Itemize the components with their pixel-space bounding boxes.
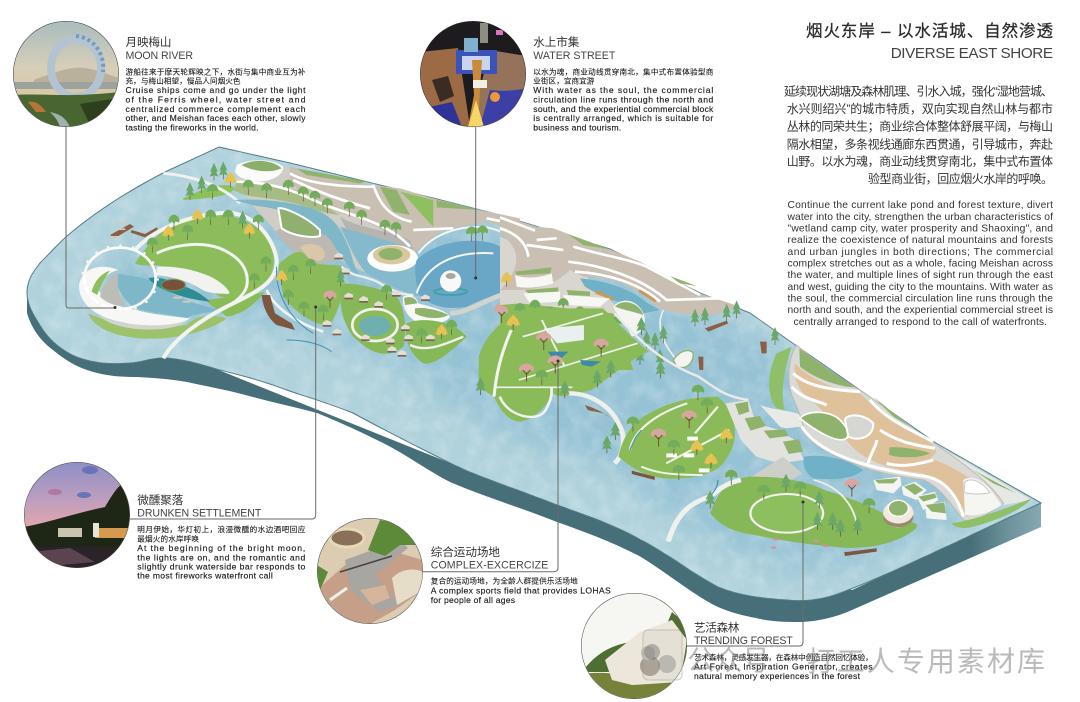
long taupe building band [290,167,520,253]
text: moon river [126,35,306,133]
photo: drunken settlement [24,462,130,568]
land under the north band [233,167,418,272]
text: trending forest: Art Forest, Inspiration Generator, creates [694,662,873,672]
pavilion roof [615,302,643,315]
text: complex-excercize: 复合的运动场地，为全龄人群提供乐活场地 [431,576,578,586]
text: complex-excercize: A complex sports field that provides LOHAS [431,586,611,596]
water shading [20,140,1050,610]
north building [235,160,283,182]
english description: and west, guiding the city to the mountains. With water as [788,282,1053,293]
playgrounds [544,325,584,343]
link walkway [760,405,803,428]
photo: art forest tent [581,593,687,699]
english description: complex stretches out as a whole, facing Meishan across [788,258,1053,270]
east roof [889,447,930,457]
text: water street: With water as the soul, the commercial [533,85,713,95]
white ribs [792,373,963,517]
tower top [964,480,990,494]
text: trending forest: natural memory experiences in the forest [694,671,861,681]
complex-excercize line [423,360,560,572]
green bank [233,182,340,215]
white terrace ribs [500,217,720,302]
pale platform [937,445,1032,505]
text: water street: circulation line runs through the north and [533,94,714,104]
moon river line [66,127,116,309]
lagoon [148,278,210,302]
text: drunken settlement: the most fireworks waterfront call [137,571,273,581]
trees west [147,161,512,343]
white tier podiums [515,273,610,307]
second island lawn [618,397,735,479]
low buildings [403,295,450,324]
fan lawn [278,252,343,325]
text: water street [533,35,714,133]
small roof pavilions [873,477,947,520]
lily pond [352,309,398,341]
dock [632,471,877,556]
text: drunken settlement: the lights are on, and the romantic and [137,552,306,562]
band bright roof [400,192,433,227]
fan edge path [267,290,323,332]
long promenade [615,313,749,400]
timber barges [595,288,657,303]
tiny pavilion [673,351,693,368]
text: water street: 水上市集 [533,35,580,49]
east tower [963,478,1002,515]
english description: Continue the current lake pond and forest texture, divert [788,200,1053,211]
text: complex-excercize: for people of all ages [431,595,515,605]
shore path [410,337,463,348]
lawn lower green [207,292,265,317]
trending forest line [687,500,804,646]
west stream [494,330,511,397]
lower skirt [952,498,1032,528]
low building roofs [404,297,448,318]
text: drunken settlement: 明月伊始，华灯初上，浪漫微醺的水边酒吧回应 [137,524,306,534]
open court [845,415,873,439]
watermark: 公众号 [687,645,770,676]
text: complex-excercize [431,545,611,605]
text: moon river: of the Ferris wheel, water street and [126,94,306,104]
water street line [474,127,477,280]
north building roof [242,161,282,171]
map: commercial complex at the east end [760,345,1032,528]
english description: the water, and multiple lines of sight run through the east [788,270,1053,281]
text: drunken settlement: 微醺聚落 [137,493,184,507]
timber pier [698,321,767,370]
river path [660,310,677,360]
central lawn [341,283,405,354]
text: water street: south, and the experiential commercial block [533,104,714,114]
big lawn [135,214,274,298]
pond water [359,316,391,336]
moon river crescent quay [79,267,190,326]
oval pavilion [367,245,418,272]
south green shore [406,320,467,364]
stream [277,267,332,352]
inner path [157,244,247,307]
ribbon promenade [135,213,277,358]
text: moon river: Cruise ships come and go under the light [126,85,306,95]
north-west shore strip [769,347,792,410]
text: drunken settlement: 最烟火的水岸呼唤 [137,533,199,543]
ferris wheel ring [83,247,157,310]
band roofs [297,168,480,215]
shore green line [873,397,1017,493]
heading [806,22,1053,62]
third island lawn [710,477,917,548]
complex base [789,345,1003,521]
text: moon river: tasting the fireworks in the world. [126,123,258,133]
band to the east [450,290,520,313]
text: water street: is centrally arranged, which is suitable for [533,113,713,123]
inner pond [804,456,863,479]
south loop [500,387,552,417]
text: water street: 业街区，宜商宜游 [533,76,595,86]
text: drunken settlement: DRUNKEN SETTLEMENT [137,507,262,519]
text: moon river: 充，与梅山相望，慢品人间烟火色 [126,76,241,86]
map: central and eastern islands [476,308,917,556]
white plaza [157,266,229,294]
drunken settlement line [130,306,317,519]
canal [580,278,660,313]
text: moon river: centralized commerce complement each [126,104,306,114]
corner pavilion [613,301,645,337]
lawn paths [494,313,638,387]
english description: realize the coexistence of natural mountains and forests [788,235,1053,246]
watermark: 打工人专用素材库 [807,646,1045,677]
heading: 烟火东岸 – 以水活城、自然渗透 [806,22,1053,40]
chinese description: 水兴则绍兴”的城市特质，双向实现自然山林与都市 [787,101,1053,116]
central basin [340,227,420,297]
callout lines [66,127,804,646]
terrain model base [27,147,1041,622]
text: moon river: MOON RIVER [126,50,193,62]
text: trending forest: TRENDING FOREST [694,635,793,647]
pond rim [417,227,520,293]
lotus flowers [771,538,828,549]
oval green roof [800,412,848,440]
photo: ferris wheel [13,21,120,127]
english description: and urban jungles in both directions; The commercial [788,247,1053,258]
trees east [476,315,875,537]
english description [786,200,1053,328]
heading: DIVERSE EAST SHORE [891,45,1053,62]
inner bay [116,273,220,318]
south ribbon [668,480,741,542]
photo: water street [420,21,526,127]
photo: sports field [317,518,423,624]
crescent shade [100,317,188,330]
cottages [323,253,435,357]
english description: north and south, and the experiential commercial street is [788,305,1053,316]
trees north [495,271,779,367]
central island lawn [479,308,649,422]
model side wall [27,293,1041,622]
stream east [630,430,718,498]
chinese description: 隔水相望，多条视线通廊东西贯通，引导城市，奔赴 [787,136,1053,151]
map: west section [79,160,520,364]
text: water street: business and tourism. [533,123,621,133]
lagoon island [161,279,185,291]
land under the terraces [500,237,617,320]
chinese description [784,84,1053,186]
chinese description: 山野。以水为魂，商业动线贯穿南北，集中式布置体 [787,154,1053,168]
second island paths [630,403,729,475]
map: north band [495,215,779,370]
top green roof [799,348,855,387]
grey plaza wedge [100,273,127,307]
tents [666,437,709,472]
water surface [27,147,1041,601]
bridge ribbon [569,393,623,463]
text: complex-excercize: 综合运动场地 [431,545,500,559]
green patch inside ring [92,271,110,295]
english description: water into the city, strengthen the urban characteristics of [786,212,1053,223]
bridge underside [585,405,611,418]
sandy court [300,244,325,261]
text: trending forest [694,620,873,681]
english description: centrally arranged to respond to the call of waterfronts. [794,317,1047,328]
text: trending forest: 艺活森林 [694,620,740,634]
chinese description: 丛林的同荣共生；商业综合体整体舒展平阔，与梅山 [787,118,1053,133]
text: moon river: other, and Meishan faces each other, slowly [126,113,306,123]
taupe terraces [500,215,740,315]
playground pieces [548,352,601,367]
text: water street: 以水为魂，商业动线贯穿南北，集中式布置体验型商 [533,66,714,76]
boats [110,223,191,303]
roof terraces [515,234,697,296]
english description: the soul, the commercial circulation line runs through the [788,294,1053,304]
steps [735,457,802,487]
watermark [643,630,1045,680]
north-west path [163,173,240,203]
text: drunken settlement: At the beginning of the bright moon, [137,543,305,553]
oval lawn [750,494,823,533]
central lawn top [500,303,633,370]
text: water street: WATER STREET [533,50,616,62]
building B podium [275,227,340,265]
island skirt under the ferris wheel [88,313,227,339]
stepped roofs [735,402,803,454]
text: moon river: 月映梅山 [126,35,172,49]
english description: "wetland camp city, water prosperity and Shaoxing", and [788,224,1053,234]
north-west green strip [183,185,234,200]
round tower [883,500,914,527]
text: drunken settlement [137,493,306,581]
white ribs of band [237,173,520,247]
curved path [814,480,858,530]
text: complex-excercize: COMPLEX-EXCERCIZE [431,559,548,571]
watermark icon [643,630,682,680]
timber dock [262,295,295,330]
tan decks [795,363,1000,517]
text: drunken settlement: slightly drunk waterside bar responds to [137,562,306,572]
text: moon river: 游船往来于摩天轮辉映之下，水街与集中商业互为补 [126,66,306,76]
pier [110,224,158,238]
grey building base [340,217,413,250]
building B roof [278,208,320,237]
curved walkway [342,267,413,295]
canal [233,200,363,278]
text: trending forest: 艺术森林，灵感发生器，在森林中创造自然回忆体验， [694,652,873,662]
dome island [434,270,467,295]
chinese description: 延续现状湖塘及森林肌理、引水入城，强化“湿地营城、 [784,84,1053,98]
chinese description: 验型商业街，回应烟火水岸的呼唤。 [868,171,1053,186]
stepped buildings [726,400,804,463]
water street pond [415,241,518,308]
